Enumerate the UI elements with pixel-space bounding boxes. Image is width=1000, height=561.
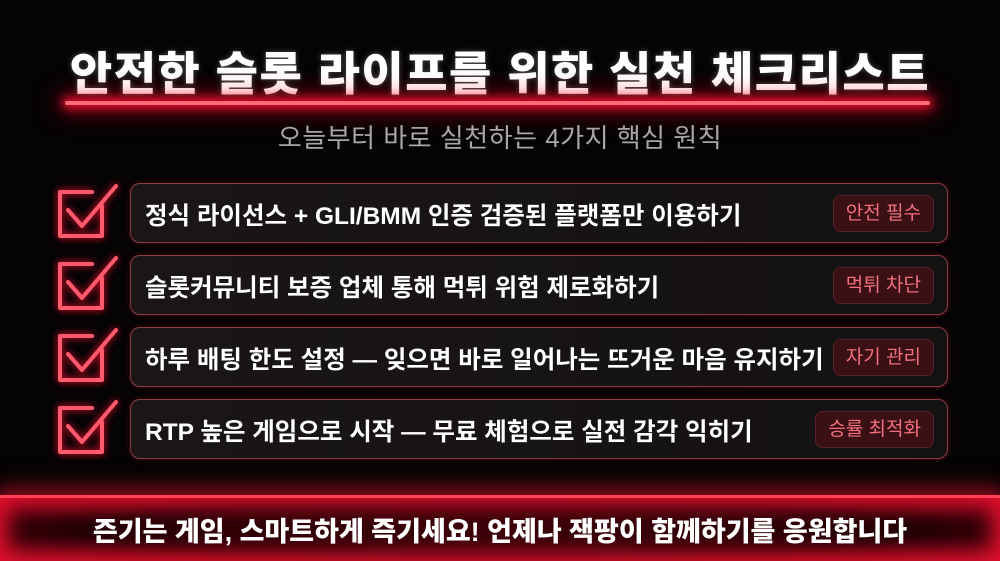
icon: checkbox 1 — [52, 179, 123, 244]
footer banner — [0, 495, 1000, 561]
item 3: 자기 관리 — [846, 347, 921, 368]
icon: checkbox 4 — [52, 395, 123, 460]
footer banner: 즌기는 게임, 스마트하게 즉기세요! 언제나 잭팡이 함께하기를 응원합니다 — [93, 517, 907, 547]
item 2 — [130, 255, 948, 315]
item 2: 먹튀 차단 — [846, 275, 921, 296]
item 4: RTP 높은 게임으로 시작 — 무료 체험으로 실전 감각 익히기 — [145, 419, 753, 446]
item 1 — [130, 183, 948, 243]
icon: checkbox 2 — [52, 251, 123, 316]
item 3: 하루 배팅 한도 설정 — 잊으면 바로 일어나는 뜨거운 마음 유지하기 — [145, 347, 824, 374]
neon underline — [65, 101, 930, 105]
icon: checkbox 3 — [52, 323, 123, 388]
item 3 — [130, 327, 948, 387]
item 1: 정식 라이선스 + GLI/BMM 인증 검증된 플랫폼만 이용하기 — [145, 203, 741, 230]
title: 안전한 슬롯 라이프를 위한 실천 체크리스트 — [70, 48, 930, 100]
item 1: 안전 필수 — [846, 203, 921, 224]
item 2: 슬롯커뮤니티 보증 업체 통해 먹튀 위험 제로화하기 — [145, 275, 659, 302]
item 4 — [130, 399, 948, 459]
item 4: 승률 최적화 — [828, 419, 921, 440]
subtitle: 오늘부터 바로 실천하는 4가지 핵심 원칙 — [278, 123, 722, 153]
